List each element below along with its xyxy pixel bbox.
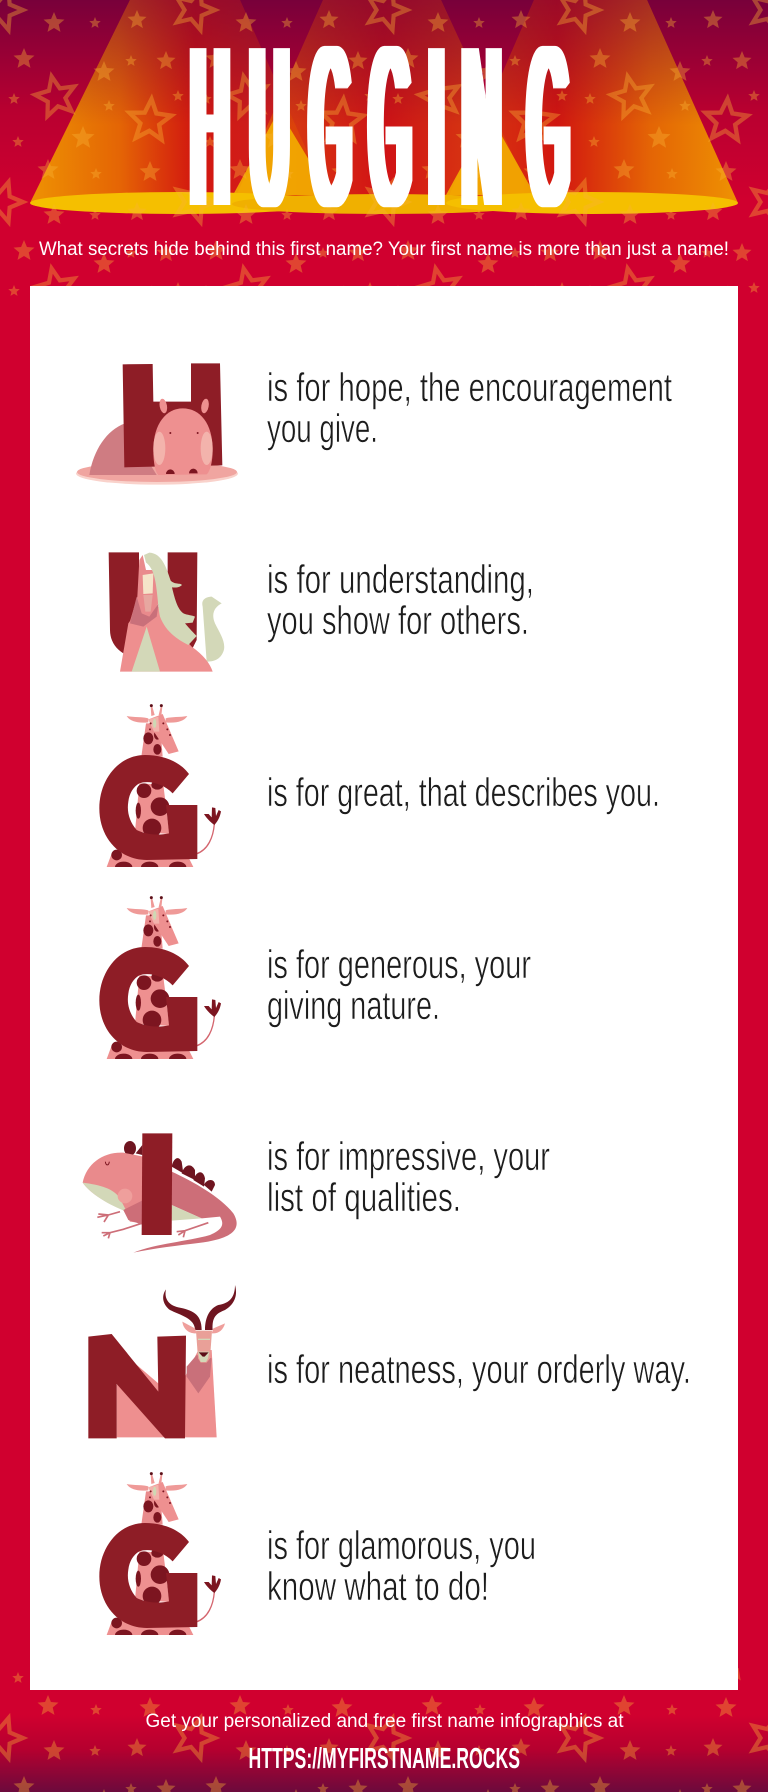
row: letter H <box>76 363 672 485</box>
icon: I with iguana <box>83 1133 237 1253</box>
title: HUGGING <box>191 0 568 255</box>
text: generous line: giving nature. <box>267 984 440 1028</box>
footer: website url: HTTPS://MYFIRSTNAME.ROCKS <box>248 1743 520 1775</box>
icon: N with antelope <box>88 1285 236 1438</box>
icon: G with giraffe <box>99 704 221 867</box>
row: letter G (generous) <box>99 896 531 1059</box>
text: generous line: is for generous, your <box>267 943 531 987</box>
text: glamorous line: know what to do! <box>267 1565 489 1609</box>
subtitle: What secrets hide behind this first name? Your first name is more than just a name! <box>39 239 729 260</box>
spotlight cones <box>30 0 738 214</box>
footer: call to action: Get your personalized and free first name infographics at <box>146 1711 624 1732</box>
row: letter N <box>88 1285 691 1438</box>
icon: G with giraffe <box>99 1472 221 1635</box>
text: glamorous line <box>267 1524 536 1609</box>
text: U line: you show for others. <box>267 599 529 643</box>
text: I line <box>267 1135 550 1220</box>
row: letter G (glamorous) <box>99 1472 536 1635</box>
text: H line: you give. <box>267 407 378 451</box>
row: letter U <box>109 552 534 672</box>
text: H line <box>267 366 672 451</box>
row: letter G (great) <box>99 704 660 867</box>
icon: G with giraffe <box>99 896 221 1059</box>
text: U line: is for understanding, <box>267 558 534 602</box>
text: I line: is for impressive, your <box>267 1135 550 1179</box>
row: letter I <box>83 1133 550 1253</box>
text: generous line <box>267 943 531 1028</box>
panel: white content card <box>30 286 738 1690</box>
text: I line: list of qualities. <box>267 1176 461 1220</box>
icon: H with hippo <box>76 363 238 485</box>
icon: U with unicorn <box>109 552 224 672</box>
text: glamorous line: is for glamorous, you <box>267 1524 536 1568</box>
text: U line <box>267 558 534 643</box>
